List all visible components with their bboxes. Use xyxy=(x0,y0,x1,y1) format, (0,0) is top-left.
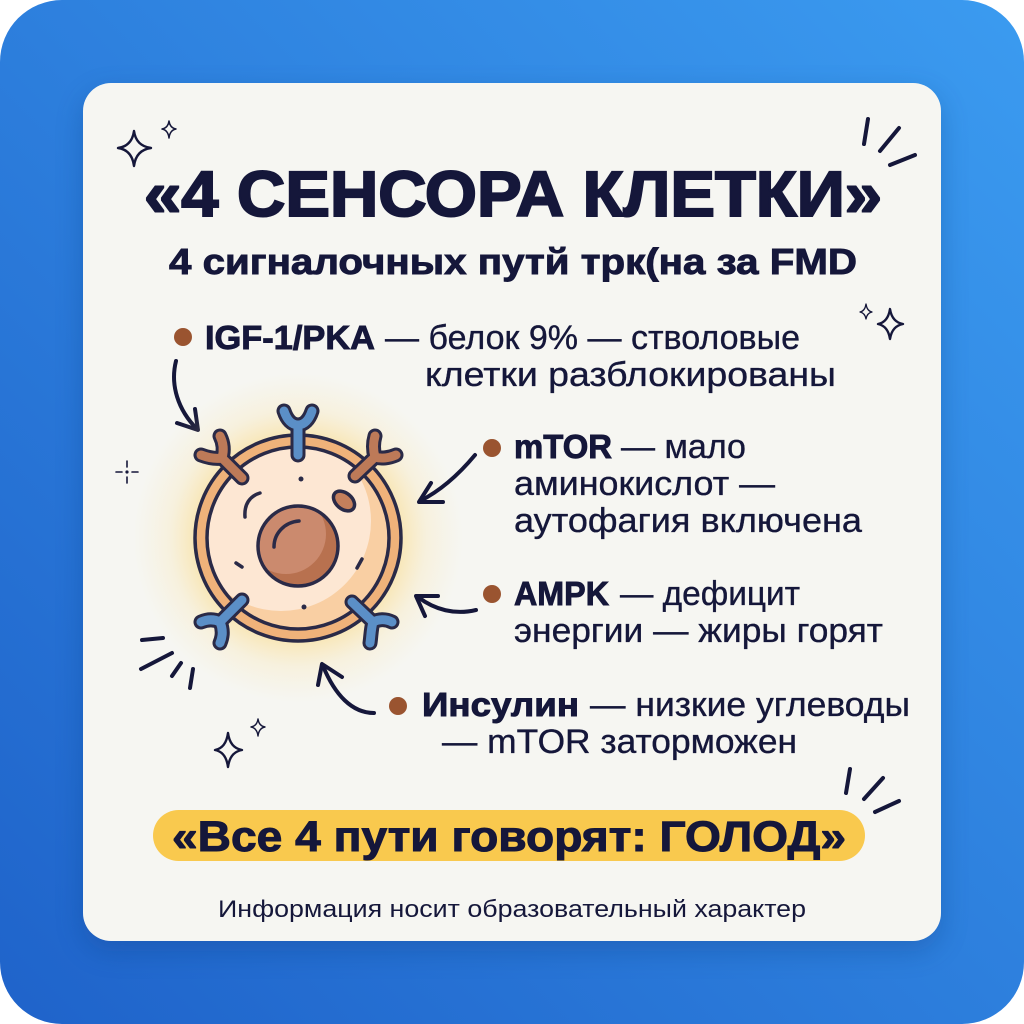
description line 1: — дефицит xyxy=(620,575,800,613)
cytoplasm highlight xyxy=(208,449,371,611)
description line 3: аутофагия включена xyxy=(514,502,862,540)
icon: sparkles top left xyxy=(118,121,176,166)
item: AMPK xyxy=(483,575,883,650)
description line 2: — mTOR заторможен xyxy=(442,723,797,761)
bullet xyxy=(389,697,407,715)
callout text: «Все 4 пути говорят: ГОЛОД» xyxy=(172,813,846,861)
icon: crosshair sparkle xyxy=(116,461,138,483)
icon: burst left xyxy=(141,638,193,688)
receptor: top-left brown xyxy=(201,436,242,478)
arrow: mTOR to cell xyxy=(419,455,475,502)
label: IGF-1/PKA xyxy=(205,319,375,356)
nucleus xyxy=(256,504,340,588)
description line 2: клетки разблокированы xyxy=(425,356,836,394)
panel: card xyxy=(83,83,941,941)
subtitle: 4 сигналочных путй трк(на за FMD xyxy=(169,241,857,282)
membrane xyxy=(195,435,401,641)
label: mTOR xyxy=(514,428,612,465)
receptor: bottom-left blue xyxy=(201,600,242,643)
title: «4 СЕНСОРА КЛЕТКИ» xyxy=(144,158,882,230)
bullet xyxy=(483,585,501,603)
label: AMPK xyxy=(514,575,609,612)
receptor: top-right brown xyxy=(355,436,396,476)
callout pill xyxy=(153,810,865,861)
description line 1: — мало xyxy=(621,428,746,466)
card shadow xyxy=(83,93,941,951)
description line 2: аминокислот — xyxy=(514,465,775,503)
cell glow xyxy=(133,373,463,703)
description line 1: — низкие углеводы xyxy=(590,686,910,724)
icon: burst top right xyxy=(864,119,915,165)
item: insulin xyxy=(389,686,910,761)
description line 1: — белок 9% — стволовые xyxy=(385,319,800,357)
icon: sparkles top right xyxy=(860,304,903,339)
receptor: top blue xyxy=(284,411,312,455)
callout xyxy=(153,810,865,861)
label: Инсулин xyxy=(422,686,579,723)
bullet xyxy=(483,439,501,457)
receptor: bottom-right blue xyxy=(352,602,392,643)
description line 2: энергии — жиры горят xyxy=(514,612,883,650)
bullet xyxy=(174,328,192,346)
arrow: IGF-1/PKA to cell xyxy=(174,361,198,430)
cytoplasm xyxy=(207,447,389,629)
icon: sparkles bottom left xyxy=(215,719,265,767)
footer note: Информация носит образовательный характер xyxy=(218,896,806,923)
item: mTOR xyxy=(483,428,862,540)
arrow: AMPK to cell xyxy=(416,596,476,616)
item: IGF-1/PKA xyxy=(174,319,836,394)
icon: burst bottom right xyxy=(846,769,899,812)
icon: cell xyxy=(191,411,401,643)
arrow: insulin to cell xyxy=(318,664,374,713)
organelles xyxy=(236,487,362,568)
